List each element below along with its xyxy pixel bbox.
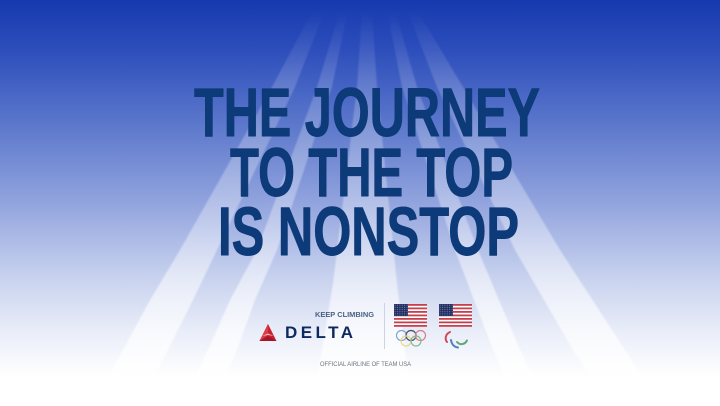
Delta logo lockup [260,312,375,342]
title: IS NONSTOP [218,193,519,270]
icon: Paralympic agitos [446,332,467,348]
keep climbing tagline: KEEP CLIMBING [315,312,375,319]
divider [384,303,385,349]
icon: Olympic US flag [394,304,427,327]
title [194,74,540,270]
official airline caption: OFFICIAL AIRLINE OF TEAM USA [320,362,411,368]
light rays [100,10,650,390]
Delta wordmark: DELTA [285,323,353,342]
title: TO THE TOP [230,134,513,211]
title: THE JOURNEY [194,74,540,151]
icon: Paralympic US flag [439,304,472,327]
icon: Olympic rings [396,330,426,346]
icon: Delta triangle [260,324,276,341]
